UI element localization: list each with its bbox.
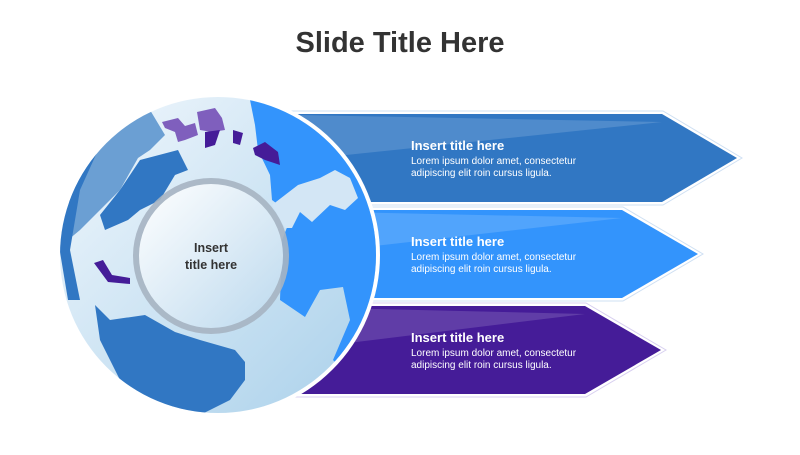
inner circle: title here [185, 258, 237, 272]
left edge band [60, 154, 96, 300]
title: Slide Title Here [296, 27, 504, 59]
ocean right [250, 100, 376, 362]
inner circle: Insert [194, 241, 229, 255]
text 1: Lorem ipsum dolor amet, consectetur [411, 156, 577, 167]
text 2: Insert title here [411, 234, 504, 249]
text 1: Insert title here [411, 138, 504, 153]
text 1 [411, 138, 577, 179]
globe [56, 93, 390, 417]
arrow 2 [250, 207, 703, 301]
text 3: Insert title here [411, 330, 504, 345]
bottom ocean [95, 305, 245, 415]
text 1: adipiscing elit roin cursus ligula. [411, 168, 552, 179]
purple islands [162, 118, 198, 142]
inner circle [133, 178, 289, 334]
land right light [272, 170, 358, 228]
text 2 [411, 234, 577, 275]
text 3 [411, 330, 577, 371]
arrow 3 [250, 303, 666, 397]
left ocean [68, 110, 165, 240]
text 2: adipiscing elit roin cursus ligula. [411, 264, 552, 275]
text 3: adipiscing elit roin cursus ligula. [411, 360, 552, 371]
text 3: Lorem ipsum dolor amet, consectetur [411, 348, 577, 359]
arrow 1 [250, 111, 742, 205]
text 2: Lorem ipsum dolor amet, consectetur [411, 252, 577, 263]
